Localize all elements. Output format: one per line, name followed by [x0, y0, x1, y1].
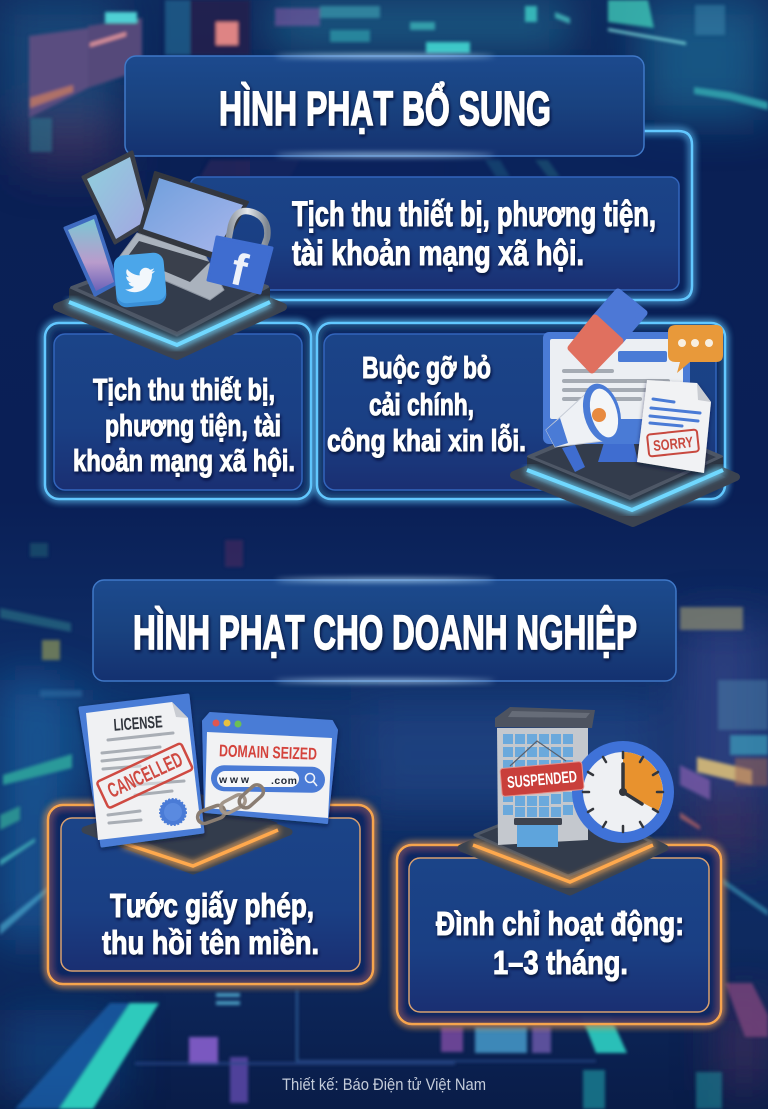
twitter tile: [113, 252, 167, 308]
heading panel: HÌNH PHẠT CHO DOANH NGHIỆP: [93, 578, 676, 683]
clock: [572, 741, 674, 843]
title glow top: [275, 578, 495, 582]
chain: [196, 782, 266, 825]
text: buộc gỡ bỏ cải chính: [327, 350, 526, 458]
browser window: www: [218, 774, 250, 786]
platform: [57, 252, 283, 356]
facebook padlock: f: [226, 243, 253, 296]
monitor: [543, 332, 690, 462]
text: đình chỉ hoạt động: 1–3 tháng.: [493, 944, 628, 981]
text: buộc gỡ bỏ cải chính: cải chính,: [369, 387, 474, 422]
panel: hình phạt bổ sung group outer frame: [250, 131, 692, 300]
icon: license cancelled and domain seized: [80, 695, 337, 871]
icon: devices on platform with twitter and facebook lock: [57, 152, 283, 356]
facebook padlock: [208, 211, 272, 296]
title glow bottom: [275, 153, 495, 157]
text: đình chỉ hoạt động: [436, 905, 684, 981]
title glow bottom: [275, 679, 495, 683]
suspended sign: SUSPENDED: [506, 768, 578, 792]
license document: CANCELLED: [104, 748, 186, 803]
platform: [85, 790, 289, 871]
text: buộc gỡ bỏ cải chính: Buộc gỡ bỏ: [362, 350, 491, 385]
suspended sign: [500, 761, 584, 797]
panel: đình chỉ hoạt động card: [397, 845, 721, 1024]
sorry letter: SORRY: [652, 434, 694, 455]
sorry letter: [637, 380, 711, 473]
license document: [80, 695, 203, 846]
text: tước giấy phép: thu hồi tên miền.: [102, 924, 319, 961]
text: buộc gỡ bỏ cải chính: công khai xin lỗi.: [327, 423, 526, 458]
text: tịch thu thiết bị: phương tiện, tài: [105, 408, 281, 443]
panel: buộc gỡ bỏ card: [317, 323, 725, 499]
browser window: DOMAIN SEIZED: [219, 741, 317, 764]
credit text: Thiết kế: Báo Điện tử Việt Nam: [282, 1075, 486, 1094]
phone: [65, 216, 117, 295]
icon: suspended building and clock: [461, 707, 674, 892]
panel: tước giấy phép card: [48, 805, 373, 984]
panel: tịch thu top card: [190, 177, 679, 290]
text: tịch thu thiết bị phương tiện: tài khoản mạng xã hội.: [292, 234, 584, 273]
text: tịch thu thiết bị: khoản mạng xã hội.: [73, 443, 295, 478]
text: tịch thu thiết bị phương tiện: [292, 195, 656, 273]
text: tịch thu thiết bị: [73, 372, 295, 478]
building: [495, 707, 595, 847]
megaphone: [546, 379, 627, 472]
license document: LICENSE: [113, 712, 163, 735]
text: tước giấy phép: [102, 887, 319, 961]
platform: [461, 797, 665, 892]
text: đình chỉ hoạt động: Đình chỉ hoạt động:: [436, 905, 684, 942]
heading text: hình phạt bổ sung: HÌNH PHẠT BỔ SUNG: [219, 81, 551, 136]
browser window: .com: [271, 775, 297, 787]
speech bubble: [668, 325, 723, 373]
panel: tịch thu left card: [45, 323, 311, 499]
heading panel: HÌNH PHẠT BỔ SUNG: [125, 54, 644, 157]
title glow top: [275, 54, 495, 58]
platform: [514, 417, 736, 523]
eraser: [571, 292, 644, 370]
icon: monitor eraser megaphone sorry letter: [514, 292, 736, 523]
tablet: [83, 152, 150, 243]
browser window: [203, 713, 337, 823]
text: tịch thu thiết bị: Tịch thu thiết bị,: [93, 372, 275, 407]
text: tước giấy phép: Tước giấy phép,: [110, 887, 314, 924]
laptop: [117, 172, 248, 300]
